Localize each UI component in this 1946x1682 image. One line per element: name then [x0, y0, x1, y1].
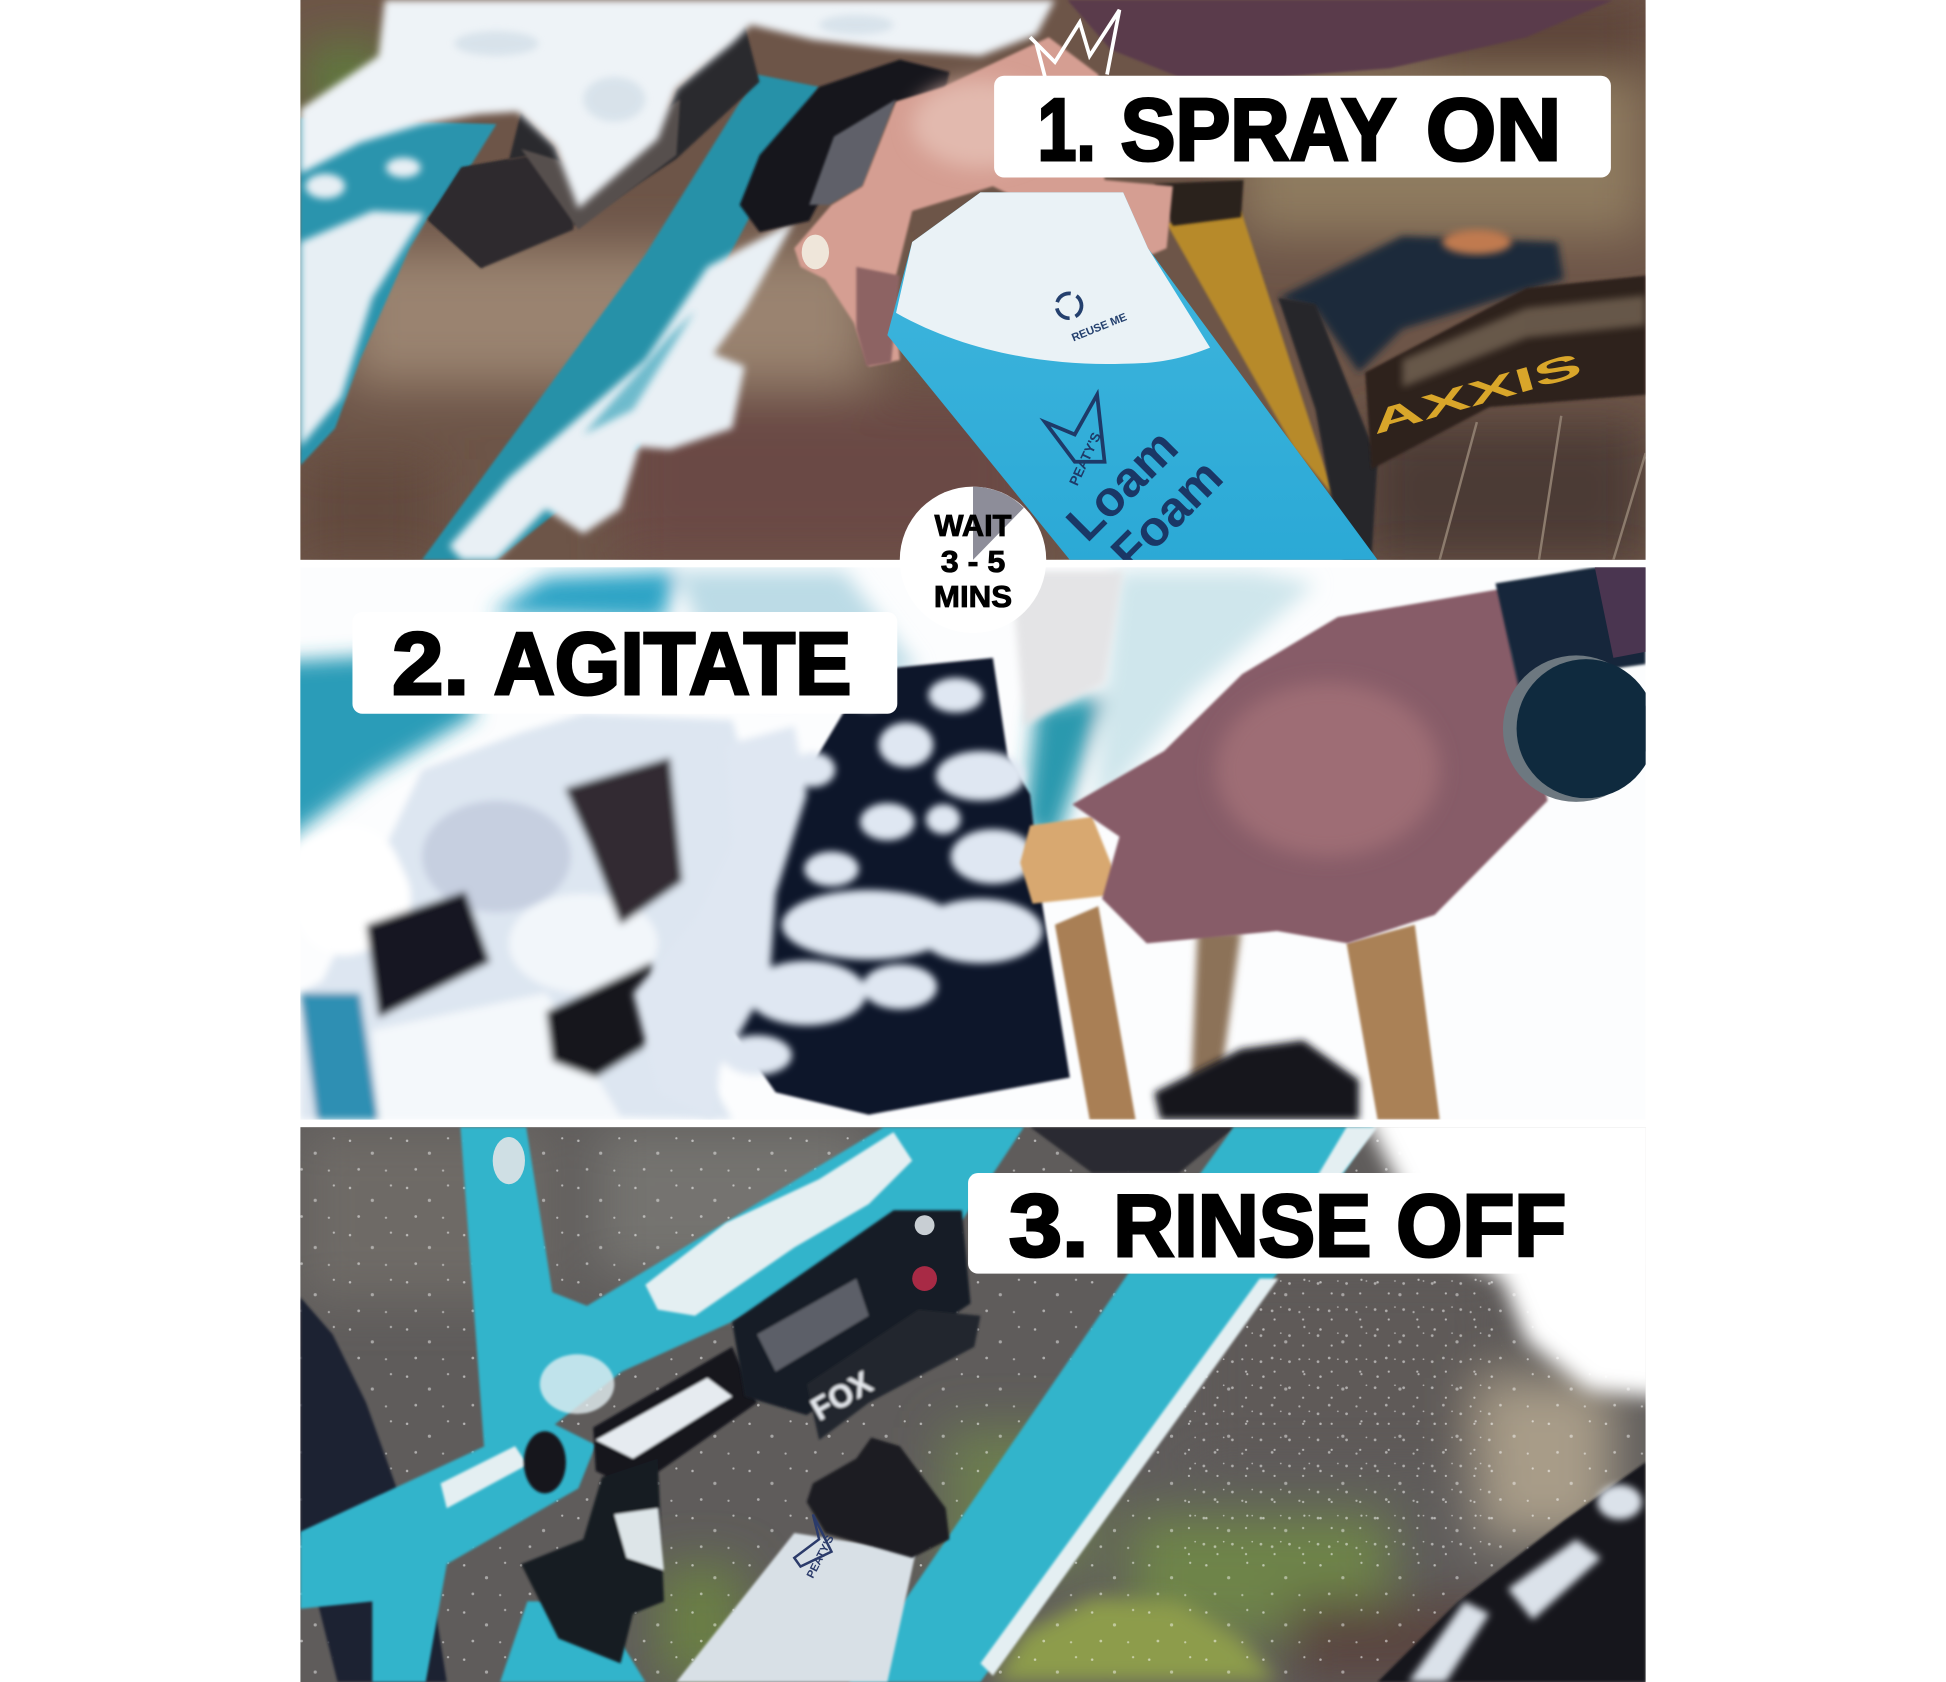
foam inside bottle — [896, 192, 1210, 364]
bottle crown mark — [794, 1514, 832, 1567]
crown outline — [1030, 10, 1119, 77]
rear shock: FOX — [805, 1364, 879, 1427]
label: 3. rinse off: OFF — [1396, 1176, 1566, 1275]
label: 3. rinse off: 3. — [1009, 1176, 1088, 1275]
wheel spokes — [1440, 416, 1646, 560]
left foam and shock — [268, 714, 769, 1120]
Peaty's brand: PEATY'S — [1066, 430, 1104, 488]
moss foreground — [993, 1598, 1278, 1682]
panel: step 3 rinse off — [300, 1092, 1713, 1682]
reuse me mark — [1055, 292, 1128, 342]
bottle — [887, 192, 1378, 581]
foam on brush — [633, 678, 1042, 1120]
reuse me mark: REUSE ME — [1070, 311, 1129, 344]
label: 3. rinse off — [968, 1173, 1646, 1275]
infographic canvas — [300, 0, 1646, 1682]
panel: step 1 spray on — [300, 0, 1646, 581]
bright background — [300, 567, 1646, 1120]
spray specks — [300, 1127, 1646, 1682]
bottle cap — [807, 1437, 949, 1558]
left frame tube — [300, 118, 496, 465]
front tyre foam — [1378, 1462, 1646, 1682]
label: 2. agitate — [352, 612, 897, 714]
minutes text: MINS — [934, 580, 1012, 614]
label: 1. spray on: 1. — [1038, 80, 1096, 179]
bottle body — [887, 192, 1378, 560]
bottle brand: PEATY'S — [805, 1533, 837, 1580]
label: 2. agitate: AGITATE — [494, 614, 851, 713]
hand holding brush — [1072, 588, 1548, 943]
spray trigger head — [740, 60, 949, 232]
foam over top of frame — [300, 0, 1055, 209]
shock bolts — [915, 1215, 935, 1235]
foam shadow detail — [454, 15, 894, 122]
teal streak in foam — [583, 310, 695, 434]
frayed white sleeve — [1011, 571, 1123, 726]
label: 1. spray on: SPRAY — [1121, 80, 1396, 179]
panel: step 2 agitate — [248, 567, 1656, 1120]
brush head bristles — [732, 658, 1070, 1115]
hand — [794, 37, 1173, 366]
brush wooden handle — [1020, 817, 1123, 904]
bottle body — [676, 1533, 916, 1682]
muddy tyre knobs — [428, 25, 760, 268]
skull decal — [493, 1137, 525, 1184]
water bottle — [676, 1437, 949, 1682]
label: 2. agitate: 2. — [392, 614, 469, 713]
rear shock — [732, 1210, 980, 1440]
teal frame — [300, 1127, 1374, 1682]
blurred forest background — [300, 1127, 1613, 1682]
gold fork legs — [1055, 906, 1136, 1120]
dark lump behind — [1154, 1040, 1359, 1120]
product name: Loam — [1055, 418, 1189, 551]
tyre branding AXXIS: AXXIS — [1367, 347, 1586, 442]
foam on left frame — [300, 158, 424, 447]
forest base colour — [300, 1127, 1646, 1682]
product name — [1055, 418, 1233, 581]
watch strap — [1495, 567, 1646, 695]
top teal frame — [248, 571, 1316, 869]
rear tyre — [300, 1297, 447, 1682]
wait text: WAIT — [935, 509, 1012, 543]
down tube — [422, 74, 819, 560]
timer wedge — [973, 487, 1024, 560]
label: 1. spray on: ON — [1426, 80, 1561, 179]
dense spray on right — [1179, 1279, 1502, 1564]
gold fork leg — [1167, 211, 1334, 497]
label: 1. spray on — [994, 76, 1611, 179]
Peaty's crown — [1045, 395, 1105, 462]
rear tyre tread — [1365, 276, 1646, 469]
duration text: 3 - 5 — [941, 545, 1005, 579]
foam on top tube — [441, 1127, 1378, 1676]
ground base colour — [300, 0, 1646, 560]
dark shape behind top tube — [1030, 1127, 1235, 1173]
sleeve — [1067, 0, 1613, 77]
watch body — [1503, 655, 1649, 802]
tyre side and fender — [1278, 236, 1564, 372]
bright top right — [1353, 1092, 1713, 1403]
label: 3. rinse off: RINSE — [1113, 1176, 1371, 1275]
hand highlight — [907, 68, 998, 172]
hand highlight — [1216, 683, 1440, 857]
thumbnail — [802, 235, 829, 269]
foam on down tube — [449, 221, 794, 560]
pivot and linkage — [521, 1347, 757, 1663]
wait timer badge — [900, 487, 1046, 633]
blurred ground background — [300, 0, 1646, 560]
product name: Foam — [1100, 448, 1233, 581]
fingers — [856, 267, 900, 366]
